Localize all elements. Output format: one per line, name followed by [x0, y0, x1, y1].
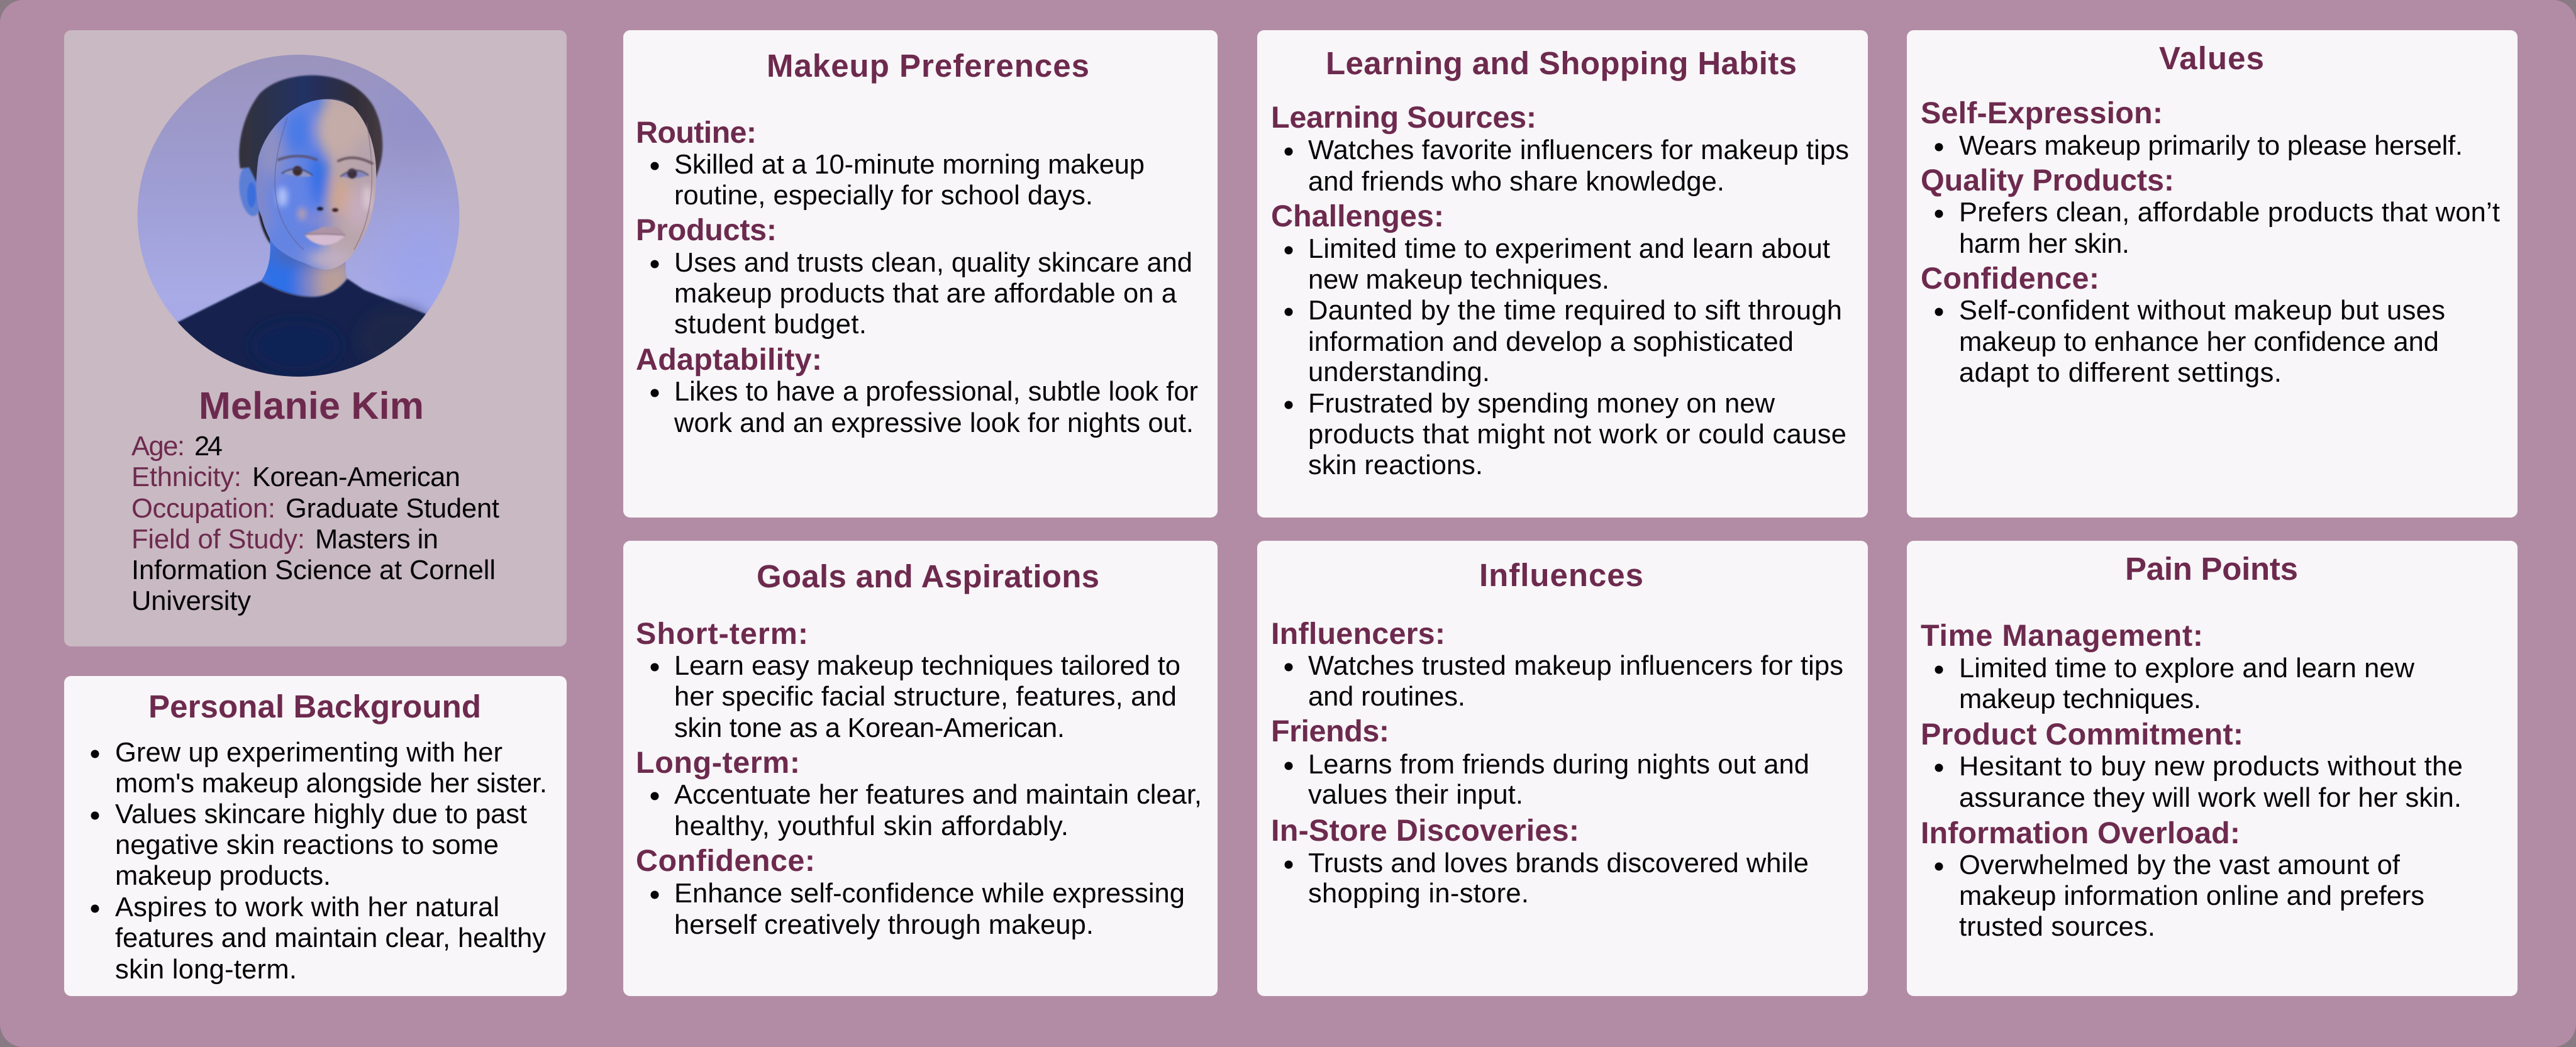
- eyebrows: [279, 156, 372, 163]
- section: in-store discoveries: shopping in-store.: [1308, 878, 1529, 909]
- section: confidence: makeup to enhance her confidence and: [1959, 327, 2439, 357]
- bullet list: makeup products.: [115, 861, 331, 891]
- section: in-store discoveries: [1271, 814, 1809, 909]
- bullet list: Grew up experimenting with her: [115, 738, 502, 768]
- section: challenges: understanding.: [1308, 357, 1490, 387]
- section: products: [636, 213, 1192, 340]
- lips: [304, 226, 345, 245]
- section: short-term: skin tone as a Korean-American.: [674, 713, 1065, 743]
- demographics: Occupation:: [131, 494, 275, 524]
- bullet list: skin long-term.: [115, 955, 297, 985]
- section: adaptability: [636, 343, 1198, 438]
- section: routine: Routine:: [636, 116, 757, 150]
- demographics: Korean-American: [252, 462, 460, 492]
- section: influencers: and routines.: [1308, 682, 1465, 712]
- demographics: University: [131, 586, 251, 616]
- panel: influences: [1257, 541, 1868, 996]
- demographics: Age:: [131, 431, 185, 462]
- section: short-term: Short-term:: [636, 617, 808, 651]
- section: information overload: [1921, 816, 2424, 942]
- section: friends: [1271, 714, 1809, 810]
- bullet list: features and maintain clear, healthy: [115, 923, 546, 953]
- section: adaptability: work and an expressive look for nights out.: [674, 408, 1194, 438]
- section: time management: [1921, 619, 2415, 714]
- section: routine: Skilled at a 10-minute morning makeup: [674, 150, 1145, 180]
- ear: [238, 167, 260, 217]
- section: self-expression: [1921, 96, 2463, 161]
- section: long-term: Accentuate her features and maintain clear,: [674, 780, 1202, 810]
- section: confidence: Confidence:: [1921, 262, 2099, 296]
- section: information overload: makeup information online and prefers: [1959, 881, 2424, 911]
- shirt: [177, 278, 426, 377]
- heading: Pain Points: [2125, 551, 2298, 587]
- section: time management: makeup techniques.: [1959, 684, 2201, 714]
- section: confidence: Enhance self-confidence while expressing: [674, 878, 1185, 909]
- heading: Personal Background: [148, 689, 481, 724]
- demographics: 24: [194, 431, 223, 462]
- heading: Values: [2159, 40, 2264, 76]
- section: challenges: products that might not work or could cause: [1308, 419, 1846, 450]
- bullet list: Values skincare highly due to past: [115, 799, 527, 829]
- section: confidence: adapt to different settings.: [1959, 358, 2282, 388]
- section: confidence: Self-confident without makeup but uses: [1959, 296, 2445, 326]
- section: routine: routine, especially for school days.: [674, 180, 1093, 211]
- section: confidence: [1921, 262, 2445, 388]
- bullet list: negative skin reactions to some: [115, 830, 499, 860]
- section: long-term: Long-term:: [636, 746, 800, 780]
- section: challenges: Frustrated by spending money on new: [1308, 389, 1775, 419]
- section: information overload: Overwhelmed by the vast amount of: [1959, 850, 2401, 880]
- bullet list: Aspires to work with her natural: [115, 892, 499, 922]
- section: product commitment: Product Commitment:: [1921, 717, 2243, 751]
- section: quality products: Quality Products:: [1921, 163, 2174, 197]
- section: confidence: Confidence:: [636, 844, 815, 878]
- section: self-expression: Wears makeup primarily to please herself.: [1959, 131, 2463, 161]
- section: information overload: Information Overload:: [1921, 816, 2240, 850]
- section: influencers: [1271, 617, 1843, 712]
- panel: values: [1907, 30, 2518, 518]
- section: in-store discoveries: Trusts and loves brands discovered while: [1308, 848, 1809, 878]
- heading: Influences: [1479, 557, 1643, 593]
- demographics: Field of Study:: [131, 524, 305, 555]
- section: friends: Learns from friends during nights out and: [1308, 750, 1809, 780]
- section: products: Uses and trusts clean, quality skincare and: [674, 248, 1192, 278]
- section: challenges: Limited time to experiment and learn about: [1308, 234, 1830, 264]
- section: influencers: Watches trusted makeup influencers for tips: [1308, 651, 1843, 681]
- section: adaptability: Adaptability:: [636, 343, 822, 377]
- panel: personal background: [64, 676, 567, 996]
- panel: learning and shopping habits: [1257, 30, 1868, 518]
- section: adaptability: Likes to have a professional, subtle look for: [674, 377, 1198, 407]
- panel: goals and aspirations: [623, 541, 1218, 996]
- section: influencers: Influencers:: [1271, 617, 1445, 651]
- hair: [239, 75, 382, 182]
- section: products: student budget.: [674, 309, 867, 340]
- demographics: [131, 431, 499, 616]
- section: challenges: information and develop a sophisticated: [1308, 327, 1794, 357]
- section: products: makeup products that are affordable on a: [674, 279, 1177, 309]
- section: long-term: healthy, youthful skin affordably.: [674, 811, 1069, 841]
- heading: Makeup Preferences: [767, 48, 1089, 84]
- section: learning sources: Learning Sources:: [1271, 101, 1536, 135]
- demographics: Masters in: [315, 524, 438, 555]
- face: [257, 99, 376, 270]
- section: challenges: [1271, 199, 1846, 480]
- section: challenges: Challenges:: [1271, 199, 1444, 233]
- section: products: Products:: [636, 213, 777, 247]
- section: challenges: Daunted by the time required to sift through: [1308, 296, 1842, 326]
- section: friends: values their input.: [1308, 780, 1523, 810]
- section: time management: Time Management:: [1921, 619, 2203, 653]
- section: learning sources: and friends who share knowledge.: [1308, 167, 1724, 197]
- section: product commitment: assurance they will work well for her skin.: [1959, 783, 2462, 813]
- panel: profile: [64, 30, 567, 646]
- bullet list: [91, 738, 547, 985]
- panel: pain points: [1907, 541, 2518, 996]
- section: learning sources: Watches favorite influencers for makeup tips: [1308, 135, 1849, 165]
- section: short-term: [636, 617, 1180, 743]
- section: confidence: [636, 844, 1185, 940]
- section: quality products: [1921, 163, 2500, 259]
- section: quality products: Prefers clean, affordable products that won’t: [1959, 197, 2500, 228]
- section: information overload: trusted sources.: [1959, 912, 2155, 942]
- demographics: Information Science at Cornell: [131, 555, 496, 585]
- section: confidence: herself creatively through makeup.: [674, 910, 1094, 940]
- demographics: Graduate Student: [286, 494, 499, 524]
- section: friends: Friends:: [1271, 714, 1389, 748]
- name: Melanie Kim: [199, 384, 424, 427]
- section: long-term: [636, 746, 1202, 841]
- section: self-expression: Self-Expression:: [1921, 96, 2163, 130]
- section: short-term: her specific facial structure, features, and: [674, 682, 1177, 712]
- heading: Learning and Shopping Habits: [1326, 45, 1797, 81]
- neck: [261, 239, 347, 297]
- section: time management: Limited time to explore and learn new: [1959, 653, 2415, 684]
- bullet list: mom's makeup alongside her sister.: [115, 768, 547, 799]
- portrait photo: [137, 55, 465, 384]
- section: routine: [636, 116, 1145, 211]
- back hair below ear: [258, 209, 270, 245]
- panel: makeup preferences: [623, 30, 1218, 518]
- section: challenges: new makeup techniques.: [1308, 265, 1609, 295]
- section: learning sources: [1271, 101, 1849, 197]
- section: in-store discoveries: In-Store Discoveries:: [1271, 814, 1579, 848]
- nose: [317, 207, 338, 212]
- section: short-term: Learn easy makeup techniques tailored to: [674, 651, 1180, 681]
- section: product commitment: Hesitant to buy new products without the: [1959, 751, 2463, 782]
- section: challenges: skin reactions.: [1308, 450, 1483, 480]
- eyes: [282, 166, 369, 179]
- section: product commitment: [1921, 717, 2463, 813]
- section: quality products: harm her skin.: [1959, 229, 2129, 259]
- loose hair strands: [275, 118, 372, 250]
- heading: Goals and Aspirations: [757, 558, 1099, 594]
- demographics: Ethnicity:: [131, 462, 242, 492]
